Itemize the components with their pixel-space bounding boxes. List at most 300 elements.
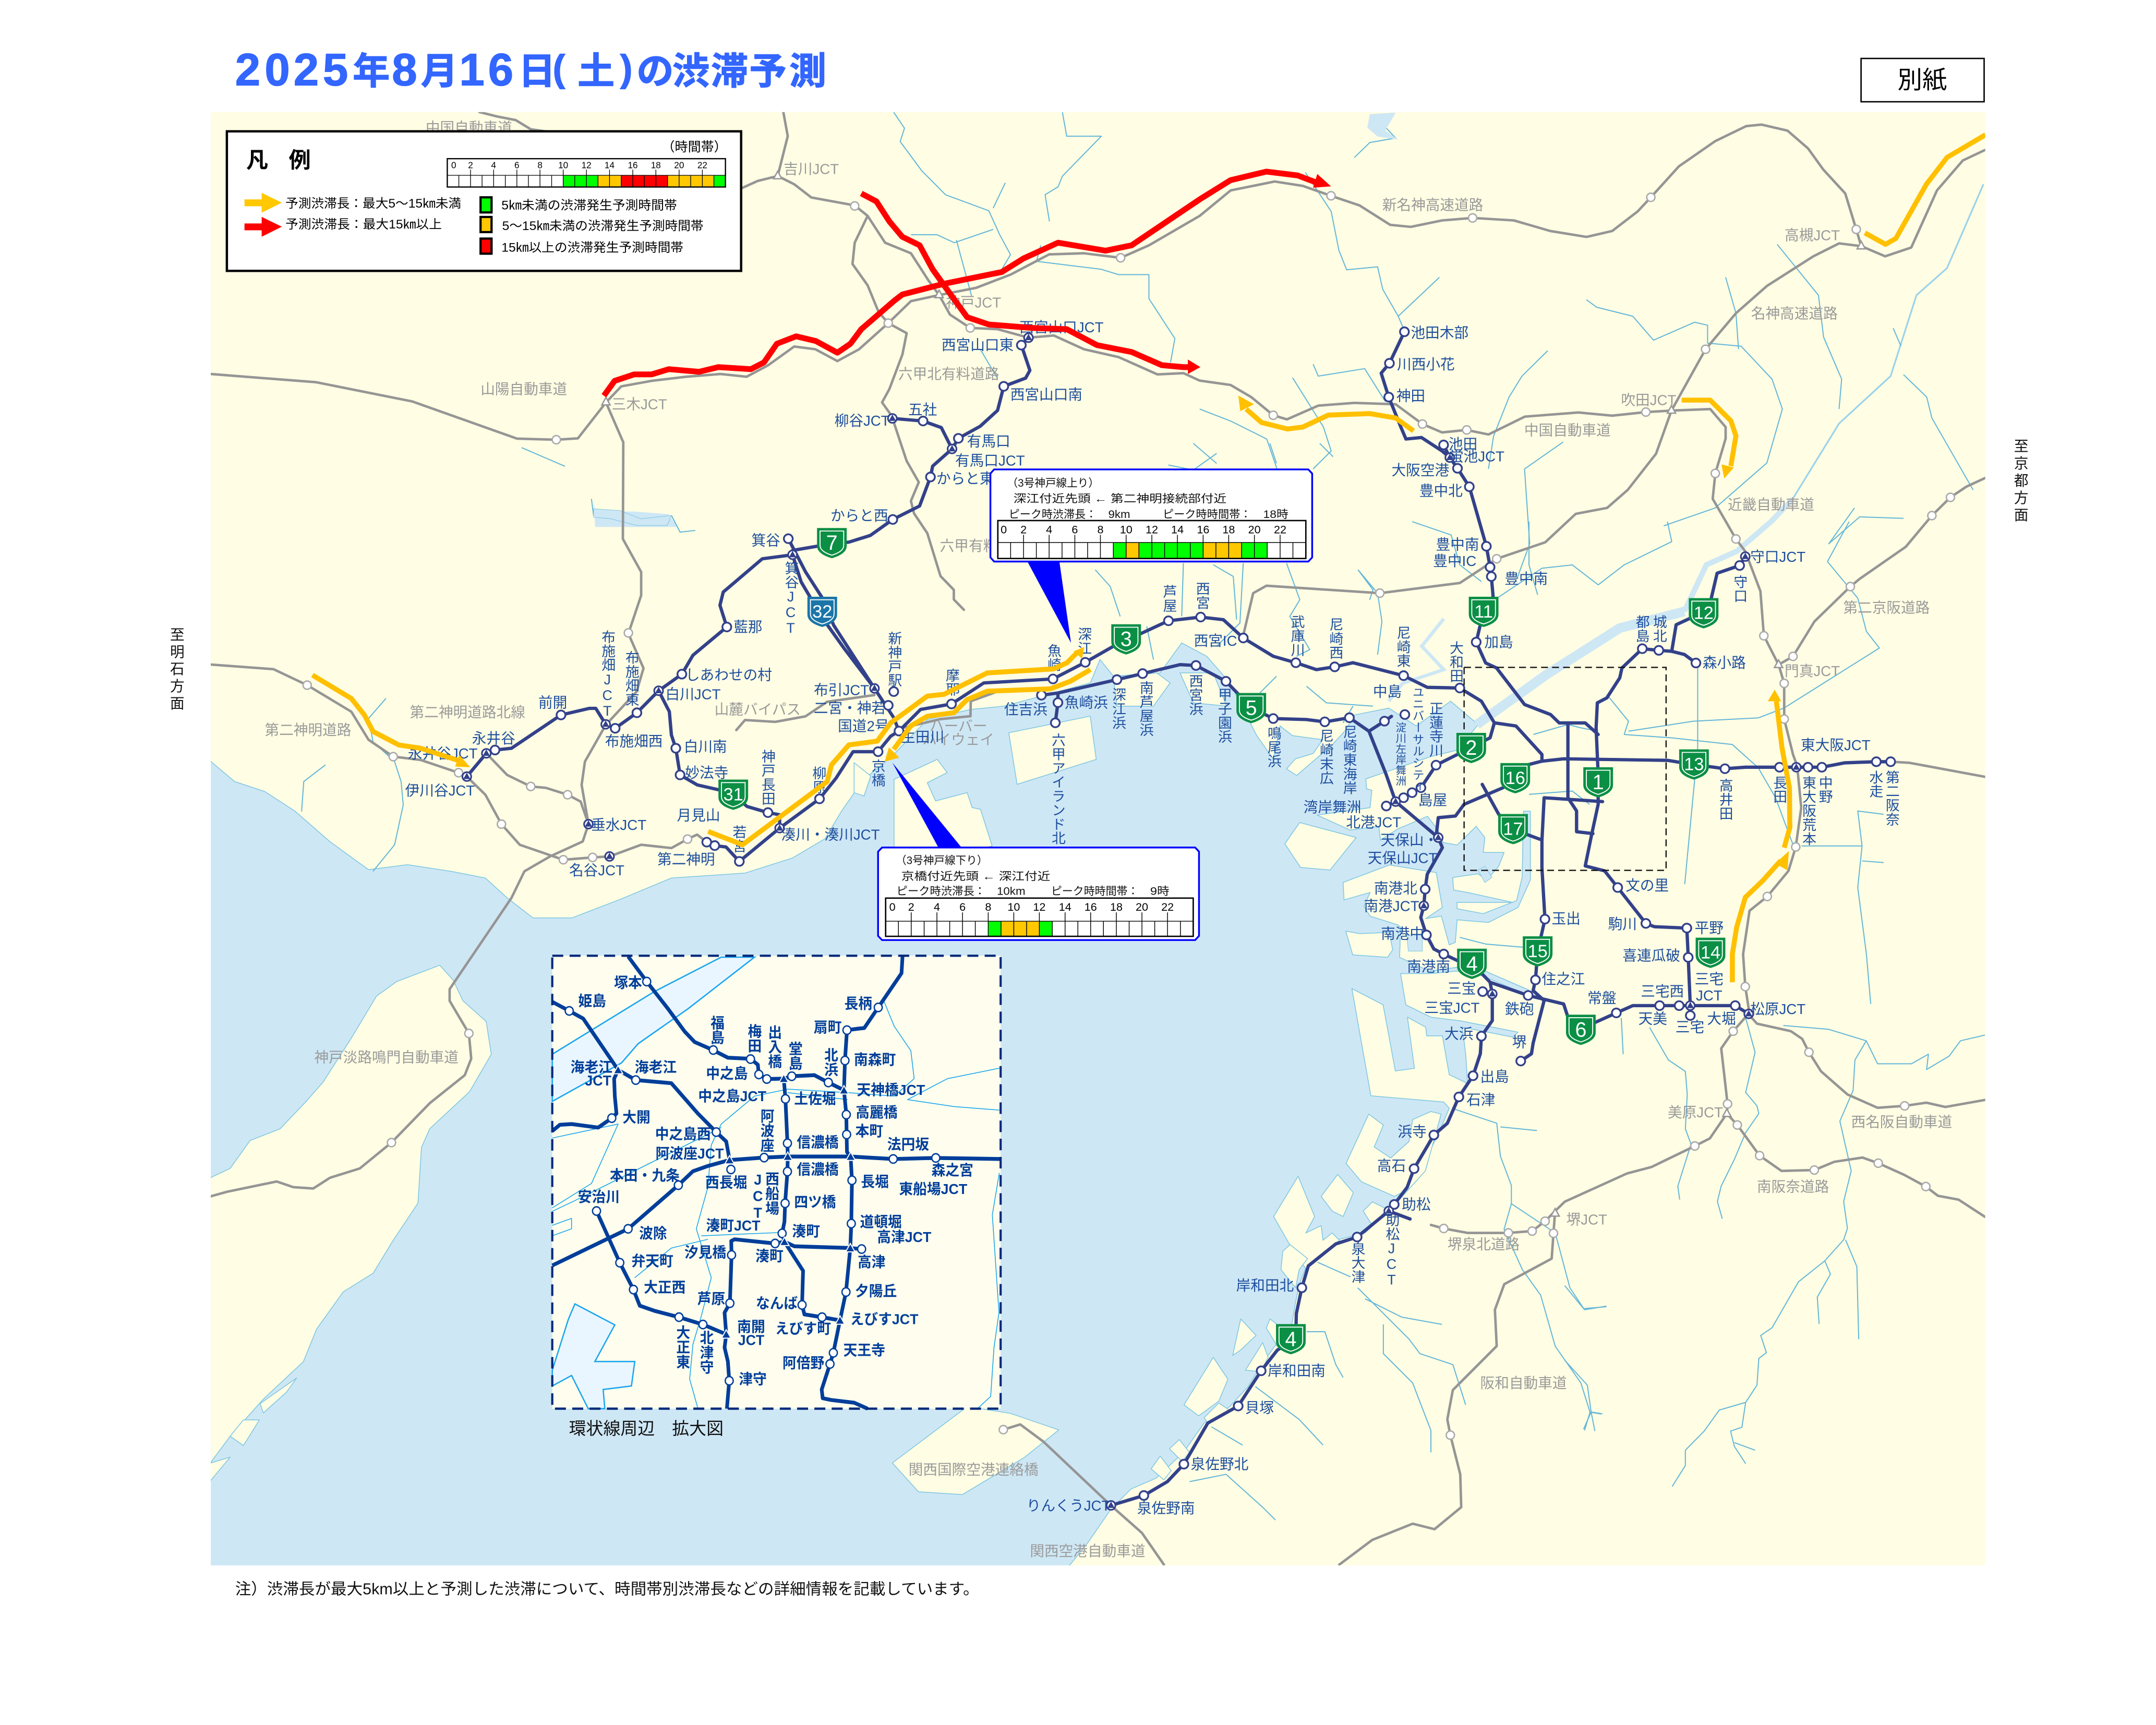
route 7 north xyxy=(792,337,1030,550)
callout text xyxy=(896,854,1170,897)
shield 13 xyxy=(1680,750,1708,779)
red arrow: Shin-Meishin xyxy=(604,172,1331,396)
pointer xyxy=(893,763,962,848)
route 5 Rokko island spur xyxy=(1055,693,1058,723)
yellow arrow: Meishin Takatsuki xyxy=(1865,135,1985,244)
inset labels: 南開 xyxy=(737,1318,765,1335)
station labels: 布引JCT xyxy=(814,682,869,698)
station labels: 箕谷 xyxy=(751,532,780,548)
inset labels: 湊町JCT xyxy=(706,1217,761,1234)
legend time bar: 0 xyxy=(451,160,456,170)
road: Meishin xyxy=(1243,150,1985,636)
gray road labels: 新名神高速道路 xyxy=(1382,197,1483,213)
shield 31: 31 xyxy=(724,785,743,805)
inset labels: 北津守 xyxy=(698,1330,714,1374)
callout text: 10km xyxy=(997,885,1026,897)
inset labels: 森之宮 xyxy=(932,1162,973,1178)
station labels: 湾岸舞洲 xyxy=(1304,799,1361,815)
yellow arrow: route 3 westbound xyxy=(885,670,1090,762)
station labels: 柳谷JCT xyxy=(835,413,890,429)
legend time caption: （時間帯） xyxy=(662,140,727,154)
station labels: 天保山・ xyxy=(1380,832,1438,848)
inset labels: 天神橋JCT xyxy=(857,1081,925,1098)
route 4 south xyxy=(1111,1036,1482,1505)
gray road labels: 山麓バイパス xyxy=(715,702,801,718)
station labels: 西宮山口東 xyxy=(942,337,1014,353)
station labels: 二宮・神若 xyxy=(814,700,886,716)
inset water areas xyxy=(552,957,999,1409)
time bar: 4 xyxy=(934,900,940,913)
Awaji shore strips xyxy=(207,1378,297,1485)
station labels: 石津 xyxy=(1466,1092,1495,1108)
station labels: 浜寺 xyxy=(1398,1124,1427,1140)
title: 8 xyxy=(392,44,417,95)
station labels: 泉大津 xyxy=(1350,1241,1365,1284)
inset labels: 大正東 xyxy=(674,1325,690,1369)
shield 12 xyxy=(1690,599,1718,628)
time bar: 0 xyxy=(889,900,896,913)
station labels: 妙法寺 xyxy=(685,765,728,781)
shield 11 xyxy=(1470,597,1498,626)
inset labels: 芦原 xyxy=(697,1290,725,1307)
inset labels: 海老江 xyxy=(571,1059,612,1076)
inset labels: 扇町 xyxy=(814,1019,841,1035)
station labels: 第二神明 xyxy=(657,851,715,867)
shield 1: 1 xyxy=(1593,771,1604,794)
inset labels: 弁天町 xyxy=(631,1253,673,1269)
gray road labels: 六甲有料道路 xyxy=(940,538,1027,554)
Nakajima branch xyxy=(1369,716,1391,731)
station labels: 加島 xyxy=(1484,634,1513,650)
gray road labels: 関西国際空港連絡橋 xyxy=(909,1462,1039,1478)
shield 31 xyxy=(719,780,748,809)
station labels: 西宮浜 xyxy=(1187,674,1203,716)
legend time bar: 20 xyxy=(674,160,684,170)
inset labels: 西船場 xyxy=(763,1171,779,1215)
dashed frame: enlarged area marker xyxy=(1464,667,1666,871)
station labels: 泉佐野北 xyxy=(1191,1456,1248,1473)
title: 土 xyxy=(577,51,615,92)
inset labels: 天王寺 xyxy=(844,1342,885,1358)
yellow arrow: Second Shinmei xyxy=(312,675,470,767)
callout text: ピーク時渋滞長： xyxy=(1009,508,1097,521)
station labels: 高石 xyxy=(1377,1158,1406,1174)
time bar: 8 xyxy=(985,900,991,913)
title: 年 xyxy=(353,51,390,92)
inset labels: 汐見橋 xyxy=(684,1244,727,1261)
station labels: 有馬口 xyxy=(967,433,1010,450)
station labels: 池田 xyxy=(1449,436,1477,452)
shield 14 xyxy=(1696,938,1725,967)
legend time bar: 12 xyxy=(582,160,592,170)
road: Second Shinmei xyxy=(210,665,707,860)
station labels: 甲子園浜 xyxy=(1216,687,1232,743)
gray road labels: 第二神明道路 xyxy=(264,722,351,738)
footnote: 注）渋滞長が最大5km以上と予測した渋滞について、時間帯別渋滞長などの詳細情報を記載しています。 xyxy=(235,1581,979,1598)
time bar: 22 xyxy=(1161,900,1174,913)
inset labels: 道頓堀 xyxy=(860,1214,902,1230)
shield 32: 32 xyxy=(812,602,832,622)
shield 3: 3 xyxy=(1121,628,1132,651)
shield 2 xyxy=(1457,733,1486,763)
gray road labels: 阪和自動車道 xyxy=(1480,1375,1567,1391)
inset labels: 海老江 xyxy=(635,1059,677,1076)
station labels: 三宅 xyxy=(1695,971,1724,987)
callout text: 京橋付近先頭 ← 深江付近 xyxy=(901,870,1051,883)
legend text: arrows xyxy=(285,197,461,232)
station labels: 大和田 xyxy=(1448,641,1463,683)
shield 15 xyxy=(1524,937,1552,966)
inset labels: 塚本 xyxy=(614,974,642,991)
shield 12: 12 xyxy=(1694,604,1714,623)
station labels: JCT xyxy=(1696,987,1723,1004)
inset caption: 環状線周辺 拡大図 xyxy=(569,1419,724,1438)
shield 4 south xyxy=(1276,1325,1305,1354)
road: Sanroku bypass and Harbor highway xyxy=(736,690,1001,730)
route 6 xyxy=(1490,982,1749,1029)
time bar: 2 xyxy=(1020,523,1027,536)
sea xyxy=(211,644,1530,1565)
station labels: 常盤 xyxy=(1587,990,1616,1006)
road: Sakai Senboku xyxy=(1431,1211,1555,1233)
station labels xyxy=(405,319,1899,1516)
legend heading: 凡 xyxy=(246,148,268,173)
gray road labels: 第二神明道路北線 xyxy=(410,704,525,720)
inset labels: 東船場JCT xyxy=(899,1181,967,1197)
station labels: 永井谷 xyxy=(472,730,515,746)
route 12 and route 1 east xyxy=(1585,557,1745,1006)
route shields xyxy=(719,529,1725,1354)
time bar: 10 xyxy=(1120,523,1133,536)
shield 11: 11 xyxy=(1474,602,1493,622)
station labels: 南港北 xyxy=(1374,880,1417,896)
callout text: （3号神戸線下り） xyxy=(896,854,988,866)
panel: map xyxy=(206,107,1990,1570)
inset labels: えびす町 xyxy=(775,1320,831,1336)
inset labels: 法円坂 xyxy=(887,1136,929,1153)
station labels: 月見山 xyxy=(677,807,720,824)
station labels: 長田 xyxy=(1771,776,1787,803)
title: 日 xyxy=(519,51,556,92)
station labels: 大堀 xyxy=(1707,1011,1736,1027)
callout text xyxy=(1007,477,1288,521)
inset roads xyxy=(552,957,1001,1409)
inset labels: 姫島 xyxy=(578,993,606,1009)
inset labels: 堂島 xyxy=(787,1041,802,1070)
road: Kansai airport xyxy=(1003,1425,1164,1565)
Morishoji branch xyxy=(1672,652,1696,663)
inset labels: 波除 xyxy=(639,1225,667,1241)
route 5 xyxy=(1041,665,1438,838)
gray road labels: 堺JCT xyxy=(1567,1212,1607,1228)
inset labels: 南森町 xyxy=(854,1051,896,1068)
gray road labels: ハイウェイ xyxy=(922,732,994,748)
station labels: 西宮IC xyxy=(1194,633,1237,649)
gray road labels: 吹田JCT xyxy=(1621,392,1676,408)
station labels: 喜連瓜破 xyxy=(1622,947,1680,963)
navy urban expressways xyxy=(467,332,1890,1505)
inset labels: 安治川 xyxy=(578,1188,620,1205)
station labels: 三宝JCT xyxy=(1424,1000,1480,1016)
road: Hanwa xyxy=(1339,1014,1748,1565)
time bar: 16 xyxy=(1197,523,1209,536)
station labels: 森小路 xyxy=(1703,655,1746,671)
station labels: 大浜 xyxy=(1444,1026,1473,1042)
gray expressways xyxy=(210,112,1985,1565)
station labels: 布施畑東 xyxy=(623,650,639,706)
callout text: 9時 xyxy=(1150,885,1170,897)
gray road labels xyxy=(264,120,1952,1559)
legend heading: 例 xyxy=(289,148,311,173)
station labels: 水走 xyxy=(1867,770,1883,798)
callout: route 3 outbound xyxy=(878,763,1199,940)
station labels: 尼崎西 xyxy=(1327,618,1343,659)
inset labels: 中之島西 xyxy=(655,1126,711,1142)
station labels: からと東 xyxy=(936,471,994,487)
reclaimed land: Sakai and Senshu coast xyxy=(1151,1112,1441,1480)
time bar: 14 xyxy=(1059,900,1071,913)
station labels: 北港JCT xyxy=(1346,814,1401,830)
station labels: 高井田 xyxy=(1717,778,1733,821)
shield 17: 17 xyxy=(1503,819,1523,839)
congestion arrows xyxy=(312,135,1985,982)
inset labels: 長柄 xyxy=(845,995,872,1012)
time bar: 12 xyxy=(1146,523,1158,536)
road: Second Shinmei north line xyxy=(486,753,588,824)
station labels: 三宝 xyxy=(1447,981,1476,997)
shield 17 xyxy=(1499,815,1527,843)
shield 4 north: 4 xyxy=(1466,952,1478,975)
station labels: 三宅 xyxy=(1676,1019,1704,1035)
road: Yoshikawa north xyxy=(778,112,788,176)
gray road labels: 山陽自動車道 xyxy=(480,381,567,397)
station labels: 天美 xyxy=(1639,1011,1667,1027)
station labels: 岸和田南 xyxy=(1268,1362,1326,1379)
station labels: 湊川・湊川JCT xyxy=(781,826,880,842)
inset labels: なんば xyxy=(756,1295,798,1311)
callout box xyxy=(991,469,1312,562)
station labels: 芦屋 xyxy=(1161,584,1177,612)
inset labels: 湊町 xyxy=(755,1248,784,1264)
shield 15: 15 xyxy=(1528,942,1548,961)
station labels: 尼崎東 xyxy=(1395,625,1411,668)
station labels: 大阪空港 xyxy=(1392,462,1449,478)
station labels: 深江浜 xyxy=(1110,687,1126,730)
station labels: 都島 xyxy=(1634,614,1649,643)
station labels: 魚崎浜 xyxy=(1065,694,1108,710)
gray road labels: 第二京阪道路 xyxy=(1843,600,1930,616)
legend text: swatches xyxy=(501,198,703,255)
road: Minami-Hanna xyxy=(1727,1114,1985,1217)
gray road labels: 門真JCT xyxy=(1785,663,1840,679)
time bar: 0 xyxy=(1001,523,1007,536)
legend time bar xyxy=(447,159,726,187)
inset labels: 福島 xyxy=(708,1015,725,1044)
time bar: 12 xyxy=(1033,900,1045,913)
shield 4 south: 4 xyxy=(1285,1328,1297,1350)
gray road labels: 近畿自動車道 xyxy=(1728,497,1814,513)
station labels: 中野 xyxy=(1817,775,1833,803)
station labels: 文の里 xyxy=(1625,877,1669,894)
route 2 xyxy=(1395,723,1495,802)
station labels: 中島 xyxy=(1373,683,1402,699)
inset labels: 信濃橋 xyxy=(797,1161,839,1178)
station labels: 五社 xyxy=(908,402,937,418)
shield 7: 7 xyxy=(826,532,838,554)
inset labels: 長堀 xyxy=(861,1174,889,1190)
station labels: 西宮山口JCT xyxy=(1019,319,1104,335)
shield 13: 13 xyxy=(1684,755,1704,775)
red arrow: Chugoku xyxy=(861,194,1200,374)
station labels: 鉄砲 xyxy=(1505,1001,1534,1017)
callout text: 18時 xyxy=(1263,509,1288,521)
shield 6: 6 xyxy=(1575,1018,1586,1041)
gray road labels: 高槻JCT xyxy=(1785,227,1840,243)
station labels: 出島 xyxy=(1480,1068,1509,1084)
time bar: 22 xyxy=(1274,523,1286,536)
station labels: 南港中 xyxy=(1381,925,1424,942)
station labels: 西宮山口南 xyxy=(1010,387,1082,403)
legend text: arrows: 予測渋滞長：最大15㎞以上 xyxy=(285,218,442,232)
station labels: 鳴尾浜 xyxy=(1266,726,1281,768)
inset labels: JCT xyxy=(750,1171,766,1221)
legend text: swatches: 5～15㎞未満の渋滞発生予測時間帯 xyxy=(502,219,703,233)
legend time bar: 18 xyxy=(651,160,661,170)
station labels: 伊川谷JCT xyxy=(405,782,475,799)
inset labels: 高津 xyxy=(858,1254,886,1270)
callout text: 9km xyxy=(1108,509,1130,521)
inset labels: 中之島 xyxy=(706,1065,748,1082)
yellow arrow: Kinki north xyxy=(1768,690,1790,848)
callout text: （3号神戸線上り） xyxy=(1007,477,1099,489)
time bar: 18 xyxy=(1222,523,1235,536)
legend text: swatches: 5㎞未満の渋滞発生予測時間帯 xyxy=(501,198,677,212)
inset labels: 中之島JCT xyxy=(698,1088,766,1104)
station labels: 玉出 xyxy=(1552,910,1581,926)
pointer xyxy=(1027,561,1071,643)
time bar xyxy=(998,521,1306,559)
station labels: 第二阪奈 xyxy=(1884,770,1899,826)
gray road labels: ハーバー xyxy=(930,718,987,734)
station labels: 南港JCT xyxy=(1364,898,1419,914)
navy interchange nodes xyxy=(462,328,1895,1510)
inset labels: 北浜 xyxy=(822,1047,838,1077)
inset labels: 湊町 xyxy=(792,1223,820,1239)
station labels: 豊中南 xyxy=(1504,571,1548,587)
inset dashed frame xyxy=(552,956,1001,1409)
station labels: からと西 xyxy=(830,508,888,524)
road: Second Keihan xyxy=(1778,478,1985,665)
inset labels: 大開 xyxy=(622,1109,651,1125)
gray road labels: 関西空港自動車道 xyxy=(1030,1543,1146,1559)
route 13 xyxy=(1542,759,1890,769)
panel: inset map of loop line xyxy=(552,956,1001,1409)
gray road labels: 吉川JCT xyxy=(784,161,839,177)
legend heading xyxy=(246,148,311,173)
station labels: 豊中南 xyxy=(1436,536,1479,552)
direction label: 至明石方面: 至明石方面 xyxy=(168,627,185,713)
Ikeda spur xyxy=(1443,445,1450,457)
inset labels: 高津JCT xyxy=(877,1228,932,1245)
road: east end of Second Hanna xyxy=(1890,762,1985,777)
route 31 xyxy=(467,555,792,777)
station labels: ユニバーサルシティ xyxy=(1411,686,1425,792)
callout text: 深江付近先頭 ← 第二神明接続部付近 xyxy=(1014,492,1226,505)
inset labels: 本田・九条 xyxy=(610,1167,680,1184)
inset labels: 阿波座 xyxy=(758,1108,775,1152)
title: ( xyxy=(553,49,565,90)
station labels: 駒川 xyxy=(1608,916,1637,932)
station labels: 池田木部 xyxy=(1411,324,1468,341)
shield 1 xyxy=(1584,768,1612,797)
station labels: 南港南 xyxy=(1407,959,1450,975)
legend swatches xyxy=(480,197,491,254)
legend time bar: 2 xyxy=(468,160,473,170)
route 16 xyxy=(1436,761,1542,838)
station labels: 魚崎 xyxy=(1045,643,1061,671)
Sukematsu spur xyxy=(1389,1211,1410,1219)
time bar: 14 xyxy=(1171,523,1184,536)
time bar: 16 xyxy=(1085,900,1097,913)
shield 16 xyxy=(1501,764,1529,793)
station labels: 柳原 xyxy=(810,766,826,794)
road: Kobe Awaji Naruto xyxy=(211,403,644,1196)
road: Kinki xyxy=(1736,539,1801,1014)
station labels: 垂水JCT xyxy=(591,817,646,833)
route 7 Yanagitani branch xyxy=(893,418,952,449)
road: Sanyo xyxy=(211,374,606,440)
attachment box: 別紙 xyxy=(1861,58,1984,102)
time bar: 20 xyxy=(1248,523,1261,536)
station labels: 正蓮寺川 xyxy=(1427,701,1443,757)
station labels: 天保山JCT xyxy=(1368,850,1437,866)
station labels: 白川JCT xyxy=(665,686,721,703)
title: 月 xyxy=(421,51,458,92)
gray road labels: 六甲北有料道路 xyxy=(898,366,999,382)
shield 5 xyxy=(1237,694,1266,722)
route 11 xyxy=(1381,332,1598,734)
shield 4 north xyxy=(1458,949,1486,978)
station labels: 布施畑西 xyxy=(605,733,663,749)
station labels: 尼崎東海岸 xyxy=(1341,725,1357,795)
legend time bar: 6 xyxy=(514,160,520,170)
Wangan Maishima spur xyxy=(1386,802,1395,806)
inset labels: 本町 xyxy=(856,1123,883,1139)
inset labels xyxy=(571,974,973,1388)
station labels: 住之江 xyxy=(1541,971,1585,987)
station labels: 新神戸駅 xyxy=(886,631,902,687)
inset labels: JCT xyxy=(585,1072,611,1089)
station labels: 泉佐野南 xyxy=(1137,1500,1195,1516)
road: Nishi-Meihan xyxy=(1748,1014,1985,1108)
station labels: 助松 xyxy=(1402,1197,1431,1213)
legend text: swatches: 15㎞以上の渋滞発生予測時間帯 xyxy=(501,240,683,255)
route 3 xyxy=(707,617,1542,861)
gray road labels: 神戸淡路鳴門自動車道 xyxy=(314,1049,459,1065)
gray road labels: 中国自動車道 xyxy=(1524,423,1611,439)
time bar: 18 xyxy=(1110,900,1123,913)
gray road labels: 三木JCT xyxy=(612,396,667,412)
station labels: りんくうJCT xyxy=(1027,1498,1111,1514)
yellow arrow: Chugoku west xyxy=(1238,395,1414,431)
station labels: 有馬口JCT xyxy=(955,453,1025,469)
time bar: 2 xyxy=(908,900,914,913)
rivers xyxy=(302,112,1985,1520)
inset labels: 信濃橋 xyxy=(797,1134,839,1151)
station labels: しあわせの村 xyxy=(685,667,772,683)
title: の渋滞予測 xyxy=(636,51,826,92)
time bar: 10 xyxy=(1007,900,1020,913)
